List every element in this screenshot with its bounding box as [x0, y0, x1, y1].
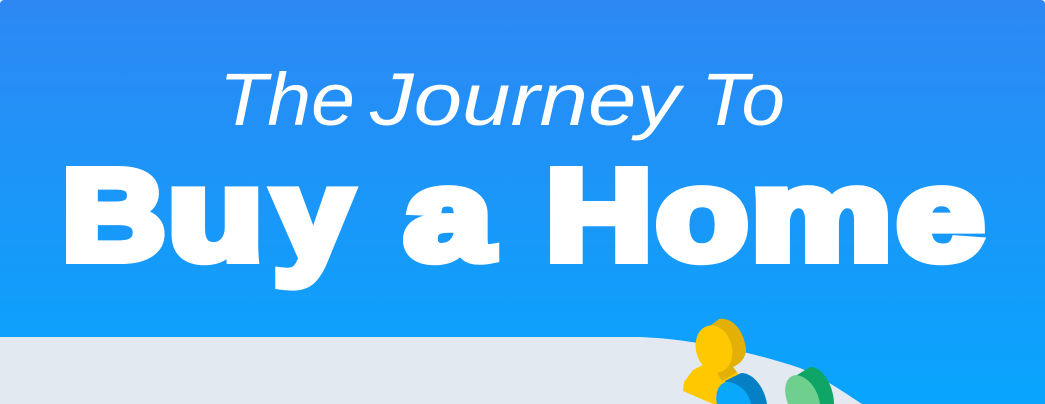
title: Buy a Home	[62, 144, 984, 287]
title: Buy a Home: e	[897, 144, 984, 287]
title: Buy a Home: a	[404, 144, 493, 287]
title: Buy a Home: B	[62, 144, 166, 287]
icon: blue person	[716, 373, 767, 404]
title: Buy a Home: H	[546, 144, 652, 287]
title: The Journey To	[219, 58, 785, 141]
curved road	[0, 337, 862, 404]
icon: green person	[785, 367, 834, 404]
icon: people figures	[683, 319, 834, 404]
title: Buy a Home: o	[656, 144, 748, 287]
icon: yellow person	[683, 319, 746, 404]
title: The Journey To: The	[219, 58, 355, 141]
title: Buy a Home: y	[274, 144, 352, 287]
title: Buy a Home: u	[168, 144, 263, 287]
title: The Journey To: To	[701, 58, 785, 141]
title: Buy a Home: m	[751, 144, 892, 287]
title: The Journey To: Journey	[369, 58, 685, 141]
